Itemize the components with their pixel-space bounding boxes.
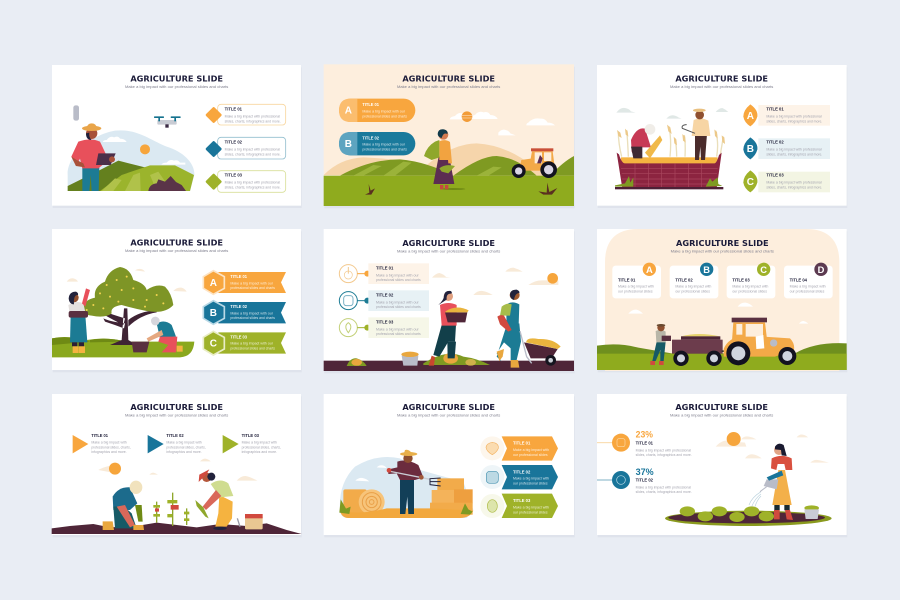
pill: B: [339, 132, 415, 155]
card: D: Make a big impact with: [790, 285, 826, 289]
arrow card: title 01: our professional slides: [513, 453, 548, 457]
card: title 03: TITLE 03: [225, 173, 243, 178]
farmer with tablet: [71, 123, 116, 191]
card: C: our professional slides: [732, 289, 767, 293]
stat: 37%: TITLE 02: [636, 478, 654, 483]
card: A: slides, charts, infographics and more.: [766, 119, 822, 123]
title: AGRICULTURE SLIDE: [675, 402, 768, 412]
slide 4: fruit tree picking: [52, 229, 302, 372]
icon: drone: [154, 116, 181, 128]
ribbon: C: professional slides and charts: [230, 346, 275, 350]
ribbon: A: professional slides and charts: [230, 286, 275, 290]
card: C: slides, charts, infographics and more.: [766, 185, 822, 189]
row: title 02: Make a big impact with our: [376, 300, 419, 304]
arrow card: title 03: Make a big impact with: [513, 505, 549, 509]
row: title 03: TITLE 03: [376, 320, 394, 325]
title: AGRICULTURE SLIDE: [130, 74, 223, 84]
card: title 02: Make a big impact with professional: [225, 147, 280, 151]
slide 7: planting seedlings: [52, 394, 302, 537]
stat: 23%: [597, 430, 692, 457]
row: title 01: TITLE 01: [376, 266, 394, 271]
step: title 03: Make a big impact with: [242, 441, 277, 445]
arrow card: title 01: Make a big impact with: [513, 448, 549, 452]
illustration: field landscape: [68, 130, 194, 191]
diamond badge: [205, 141, 222, 157]
step: title 03: [223, 433, 281, 454]
slide 2: woman with crops and tractor: [324, 64, 575, 208]
card: A: [743, 104, 830, 126]
card: title 01: TITLE 01: [225, 107, 243, 112]
ribbon: C: C: [210, 339, 217, 350]
tractor: [724, 318, 796, 365]
icon: [486, 442, 498, 455]
slide 1: farmer with tablet and drone: [52, 65, 302, 208]
card: title 03: slides, charts, infographics and more.: [225, 185, 281, 189]
vegetable bed: [665, 506, 832, 526]
step: title 02: [148, 433, 206, 454]
subtitle: Make a big impact with our professional slides and charts: [397, 413, 500, 418]
farmer: woman bending: [631, 124, 662, 158]
pill: B: professional slides and charts: [362, 148, 407, 152]
pill: A: [339, 99, 415, 122]
card: title 01: [205, 104, 286, 125]
arrow card: title 02: TITLE 02: [513, 469, 531, 474]
card: C: C: [747, 177, 754, 188]
bucket of vegetables: [804, 505, 819, 519]
icon circle: [612, 434, 630, 452]
ribbon: A: Make a big impact with our: [230, 281, 274, 285]
row: title 03: professional slides and charts: [376, 332, 421, 336]
hexagon badge: [203, 271, 224, 294]
illustration: ground and tree: [52, 267, 194, 357]
slide 5: harvest with wheelbarrow: [324, 229, 575, 373]
card: A: Make a big impact with: [618, 285, 654, 289]
arrow card: title 02: our professional slides: [513, 482, 548, 486]
pill: A: professional slides and charts: [362, 114, 407, 118]
pill: A: TITLE 01: [362, 102, 380, 107]
farmer: man with scythe: [682, 109, 710, 160]
card: C: [743, 170, 830, 192]
card: [368, 290, 429, 311]
ribbon: B: TITLE 02: [230, 304, 248, 309]
pill: B: Make a big impact with our: [362, 143, 406, 147]
woman carrying crate: [429, 291, 469, 366]
card: A: TITLE 01: [766, 107, 784, 112]
card: A: A: [646, 265, 653, 275]
card: C: [727, 263, 775, 298]
ribbon: C: Make a big impact with our: [230, 342, 274, 346]
arrow card: title 02: [480, 465, 558, 489]
hexagon badge: [203, 331, 224, 355]
arrow card: title 03: our professional slides: [513, 510, 548, 514]
diamond badge: [205, 107, 222, 123]
title: AGRICULTURE SLIDE: [402, 238, 495, 248]
step: title 02: professional slides, charts,: [166, 445, 206, 449]
farmer with pitchfork: [387, 450, 441, 514]
ribbon: B: B: [210, 308, 217, 319]
card: A: [612, 263, 661, 298]
card: title 01: slides, charts, infographics and more.: [225, 119, 281, 123]
step: title 03: professional slides, charts,: [242, 445, 281, 449]
card: B: slides, charts, infographics and more.: [766, 152, 822, 156]
subtitle: Make a big impact with our professional slides and charts: [670, 413, 773, 418]
card: B: [670, 263, 718, 298]
badge: [643, 263, 656, 276]
stat: 37%: [597, 467, 692, 494]
title: AGRICULTURE SLIDE: [130, 402, 223, 412]
card: B: [743, 137, 830, 159]
illustration: sun and clouds: [716, 432, 829, 463]
arrow card: title 01: TITLE 01: [513, 441, 531, 446]
title: AGRICULTURE SLIDE: [402, 74, 495, 84]
card: A: TITLE 01: [618, 277, 636, 282]
card: B: our professional slides: [675, 289, 710, 293]
icon circle: [612, 471, 630, 489]
crate of tomatoes: [237, 514, 263, 529]
badge: [814, 263, 828, 276]
card: B: TITLE 02: [766, 140, 784, 145]
card: [368, 317, 429, 338]
woman carrying crops: [424, 129, 465, 190]
slide 8: hay bales and pitchfork: [324, 394, 575, 537]
ribbon: C: TITLE 03: [230, 334, 248, 339]
row: title 03: Make a big impact with our: [376, 327, 419, 331]
diamond badge: [205, 173, 222, 190]
card: C: C: [760, 265, 767, 275]
basket of wheat: [615, 153, 723, 189]
subtitle: Make a big impact with our professional slides and charts: [125, 84, 228, 89]
arrow card: title 02: Make a big impact with: [513, 477, 549, 481]
card: B: B: [703, 265, 710, 275]
card: B: Make a big impact with professional: [766, 147, 822, 151]
pill: B: TITLE 02: [362, 135, 380, 140]
card: D: TITLE 04: [790, 277, 808, 282]
arrow card: title 01: [480, 436, 558, 461]
card: title 02: [205, 137, 286, 159]
pill: B: B: [345, 139, 352, 150]
farmer with crate: [650, 324, 671, 365]
row: title 02: [339, 290, 429, 311]
icon: remote control: [73, 105, 79, 121]
card: title 01: Make a big impact with professional: [225, 114, 280, 118]
card: D: [784, 263, 833, 298]
stat: 37%: slides, charts, infographics and more.: [636, 490, 692, 494]
card: C: TITLE 03: [766, 173, 784, 178]
hexagon badge: [203, 301, 224, 324]
card: A: A: [747, 111, 754, 122]
illustration: ground and clouds: [597, 303, 847, 370]
card: C: TITLE 03: [732, 277, 750, 282]
title: AGRICULTURE SLIDE: [675, 74, 768, 84]
pill: A: A: [345, 106, 352, 117]
step: title 03: TITLE 03: [242, 433, 260, 438]
row: title 02: professional slides and charts: [376, 305, 421, 309]
stat: 23%: TITLE 01: [636, 440, 654, 445]
card: C: Make a big impact with professional: [766, 180, 822, 184]
arrow card: title 03: TITLE 03: [513, 498, 531, 503]
card: D: D: [818, 265, 825, 275]
subtitle: Make a big impact with our professional slides and charts: [397, 84, 500, 89]
ribbon: A: [203, 271, 286, 294]
step: title 02: TITLE 02: [166, 433, 184, 438]
row: title 03: [339, 317, 429, 338]
step: title 01: TITLE 01: [91, 433, 109, 438]
leaf badge: [743, 137, 757, 159]
row: title 01: professional slides and charts: [376, 278, 421, 282]
title: AGRICULTURE SLIDE: [676, 238, 769, 248]
ribbon: A: TITLE 01: [230, 274, 248, 279]
subtitle: Make a big impact with our professional slides and charts: [125, 413, 228, 418]
badge: [757, 263, 770, 276]
pill: A: Make a big impact with our: [362, 109, 406, 113]
illustration: landscape: [324, 111, 574, 206]
stat: 23%: slides, charts, infographics and more.: [636, 453, 692, 457]
stat: 37%: Make a big impact with professional: [636, 485, 691, 489]
card: D: our professional slides: [790, 289, 824, 293]
stat: 37%: 37%: [636, 467, 654, 477]
step: title 02: Make a big impact with: [166, 441, 202, 445]
title: AGRICULTURE SLIDE: [402, 402, 495, 412]
stat: 23%: 23%: [636, 430, 654, 440]
row: title 01: [339, 263, 429, 284]
leaf badge: [743, 170, 757, 192]
card: title 02: TITLE 02: [225, 140, 243, 145]
triangle marker: [73, 435, 88, 453]
trailer: [672, 334, 728, 366]
subtitle: Make a big impact with our professional slides and charts: [397, 248, 500, 253]
woman picking fruit: [68, 288, 90, 353]
ribbon: B: professional slides and charts: [230, 316, 275, 320]
triangle marker: [223, 435, 239, 453]
step: title 01: professional slides, charts,: [91, 445, 131, 449]
card: B: B: [747, 144, 754, 155]
icon: [486, 471, 498, 483]
subtitle: Make a big impact with our professional slides and charts: [670, 84, 773, 89]
slide 3: wheat harvest: [597, 65, 847, 208]
tractor: [512, 148, 557, 178]
illustration: sun, clouds, soil: [52, 459, 302, 534]
step: title 01: [73, 433, 131, 454]
row: title 01: Make a big impact with our: [376, 273, 419, 277]
row: title 02: TITLE 02: [376, 293, 394, 298]
seedlings: [153, 493, 189, 526]
card: [368, 263, 429, 284]
card: C: Make a big impact with: [732, 285, 768, 289]
card: title 02: slides, charts, infographics and more.: [225, 152, 281, 156]
illustration: clouds and wheat: [616, 108, 728, 157]
slide 9: watering cabbages: [597, 394, 847, 537]
card: B: TITLE 02: [675, 277, 693, 282]
badge: [700, 263, 713, 276]
triangle marker: [148, 435, 164, 453]
step: title 02: infographics and more.: [166, 450, 202, 454]
slide 6: tractor with trailer: [597, 229, 847, 372]
woman planting: [195, 469, 233, 530]
man kneeling with basket: [132, 317, 183, 352]
subtitle: Make a big impact with our professional slides and charts: [125, 248, 228, 253]
card: title 03: Make a big impact with professional: [225, 180, 280, 184]
ribbon: B: [203, 301, 286, 324]
woman watering plants: [749, 444, 793, 520]
card: title 03: [205, 171, 286, 192]
title: AGRICULTURE SLIDE: [130, 237, 223, 247]
card: A: our professional slides: [618, 289, 653, 293]
leaf badge: [743, 104, 757, 126]
farmer kneeling: [103, 481, 144, 530]
step: title 03: infographics and more.: [242, 450, 277, 454]
card: B: Make a big impact with: [675, 285, 711, 289]
ribbon: A: A: [210, 278, 217, 289]
man with wheelbarrow: [497, 290, 561, 368]
step: title 01: Make a big impact with: [91, 441, 127, 445]
card: A: Make a big impact with professional: [766, 114, 822, 118]
step: title 01: infographics and more.: [91, 450, 127, 454]
peach panel: [605, 229, 839, 371]
illustration: ground, sun, clouds: [324, 268, 574, 371]
ribbon: B: Make a big impact with our: [230, 311, 274, 315]
icon: [487, 500, 497, 512]
illustration: sky and hay: [339, 457, 473, 518]
subtitle: Make a big impact with our professional slides and charts: [671, 248, 774, 253]
stat: 23%: Make a big impact with professional: [636, 448, 691, 452]
arrow card: title 03: [480, 494, 558, 518]
ribbon: C: [203, 331, 286, 355]
